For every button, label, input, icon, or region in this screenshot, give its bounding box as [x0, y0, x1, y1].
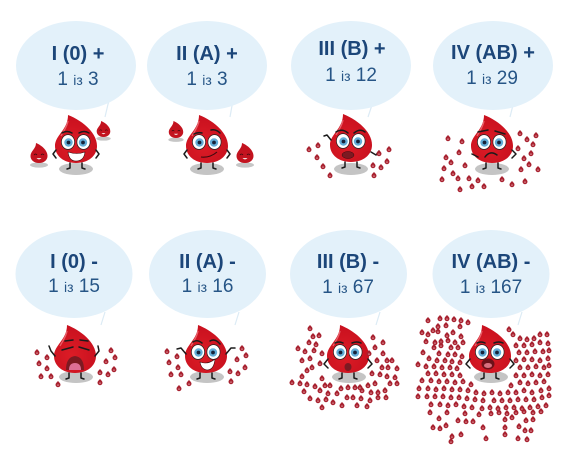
mascot cheering drop: [177, 325, 235, 383]
heading I (0) -: I (0) -: [50, 251, 98, 273]
panel: III (B) +: [291, 21, 411, 178]
mascot smiling drop: [184, 115, 230, 175]
mascot crying drop: [49, 325, 99, 383]
panel: II (A) +: [147, 21, 267, 175]
panel: III (B) -: [290, 230, 407, 410]
ratio 1 in 12: 1 із 12: [325, 65, 377, 86]
panel: I (0) -: [16, 230, 132, 387]
ratio 1 in 167: 1 із 167: [460, 277, 522, 298]
ratio 1 in 3: 1 із 3: [186, 69, 228, 90]
scattered small drops: 1 in 29: [440, 130, 540, 192]
ratio 1 in 3: 1 із 3: [57, 69, 99, 90]
scattered small drops: 1 in 15: [34, 347, 118, 387]
scattered small drops: 1 in 67: [290, 325, 400, 410]
speech bubble III (B) -: [290, 230, 407, 325]
panel: II (A) -: [149, 230, 266, 391]
speech bubble IV (AB) +: [433, 21, 553, 117]
speech bubble III (B) +: [291, 21, 411, 117]
ratio 1 in 29: 1 із 29: [466, 68, 518, 89]
scattered small drops: 1 in 12: [306, 142, 392, 178]
small drops: [30, 121, 111, 168]
speech bubble I (0) -: [16, 230, 132, 325]
mascot worried drop: [324, 114, 379, 175]
panel: IV (AB) +: [433, 21, 553, 192]
heading II (A) -: II (A) -: [179, 251, 236, 273]
speech bubble IV (AB) -: [432, 230, 550, 325]
heading IV (AB) -: IV (AB) -: [452, 251, 530, 273]
panel: IV (AB) -: [416, 230, 552, 444]
heading III (B) -: III (B) -: [317, 251, 379, 273]
panel: I (0) +: [16, 21, 136, 175]
small drops: [168, 121, 254, 168]
speech bubble II (A) +: [147, 21, 267, 117]
scattered small drops: 1 in 167: [416, 315, 552, 444]
heading IV (AB) +: IV (AB) +: [451, 42, 535, 64]
mascot surprised drop: [324, 325, 372, 383]
heading III (B) +: III (B) +: [318, 38, 386, 60]
speech bubble II (A) -: [149, 230, 266, 325]
ratio 1 in 16: 1 із 16: [182, 276, 233, 297]
ratio 1 in 15: 1 із 15: [48, 276, 100, 297]
mascot frowning drop: [471, 115, 516, 175]
ratio 1 in 67: 1 із 67: [322, 277, 374, 298]
heading I (0) +: I (0) +: [52, 43, 104, 65]
speech bubble I (0) +: [16, 21, 136, 117]
mascot shocked drop: [466, 325, 514, 383]
scattered small drops: 1 in 16: [164, 345, 248, 391]
mascot happy drop: [53, 115, 99, 175]
heading II (A) +: II (A) +: [176, 43, 238, 65]
